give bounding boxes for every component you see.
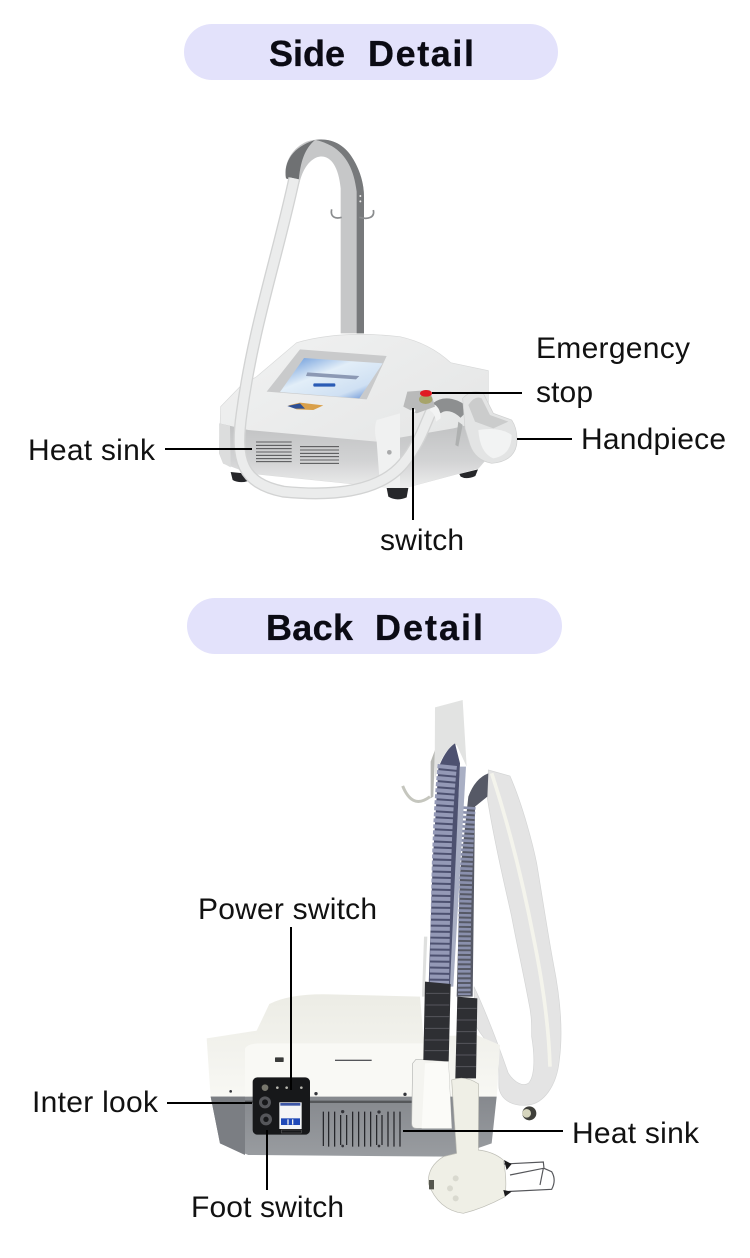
- device: back view hoses: [403, 700, 561, 1120]
- feet: [231, 469, 478, 499]
- wire tip guard: [504, 1162, 554, 1192]
- title pill: Side Detail: [184, 24, 558, 80]
- label: Handpiece: Handpiece: [581, 423, 726, 456]
- white body: [207, 994, 500, 1098]
- label: Heat sink back: Heat sink: [572, 1117, 700, 1150]
- screen: [280, 358, 383, 398]
- front corner facet: [375, 413, 400, 488]
- label: Emergency stop: [536, 332, 690, 409]
- title pill: Side Detail: Side: [269, 33, 345, 74]
- rear control panel: [253, 1077, 310, 1135]
- caster: [522, 1106, 536, 1120]
- second hose: [457, 773, 488, 997]
- first hose: [429, 743, 460, 985]
- emergency stop: [403, 390, 435, 413]
- label: Emergency stop: stop: [536, 376, 593, 409]
- handpiece buttons: [447, 1175, 459, 1201]
- device: back view machine: [207, 982, 554, 1213]
- title pill: Back Detail: [187, 598, 562, 654]
- hooks: [331, 209, 374, 218]
- bracket plate: [412, 1059, 452, 1128]
- lower grey band: [219, 420, 488, 488]
- label: switch: switch: [380, 524, 464, 557]
- black corrugated sleeves: [423, 982, 477, 1078]
- leader lines: back view: [167, 927, 563, 1190]
- title pill: Back Detail: Back: [266, 607, 354, 648]
- label: Inter look: Inter look: [32, 1086, 159, 1119]
- outer sleeve: [474, 770, 561, 1105]
- title pill: Back Detail: Detail: [375, 607, 483, 648]
- label: Power switch: Power switch: [198, 893, 377, 926]
- screen bezel: [267, 349, 387, 399]
- stand arm: [286, 139, 364, 333]
- label: Foot switch: Foot switch: [191, 1191, 344, 1224]
- title pill: Side Detail: Detail: [368, 33, 474, 74]
- arm back: [435, 700, 467, 780]
- label: Heat sink side: Heat sink: [28, 434, 156, 467]
- handpiece: [455, 392, 517, 463]
- handle: [428, 1078, 506, 1213]
- label: Emergency stop: Emergency: [536, 332, 690, 365]
- grey base: [211, 1097, 497, 1157]
- tube: [239, 178, 433, 493]
- screws: [229, 1090, 407, 1147]
- device: side view machine: [219, 139, 517, 499]
- leader lines: side view: [165, 393, 572, 520]
- connector hose: [437, 405, 465, 413]
- heat sink vents: [323, 1112, 400, 1147]
- hooks: [403, 786, 430, 801]
- usb port and slot: [275, 1057, 284, 1062]
- main shell: [219, 334, 488, 488]
- logo: [288, 403, 323, 410]
- vents: [256, 442, 339, 463]
